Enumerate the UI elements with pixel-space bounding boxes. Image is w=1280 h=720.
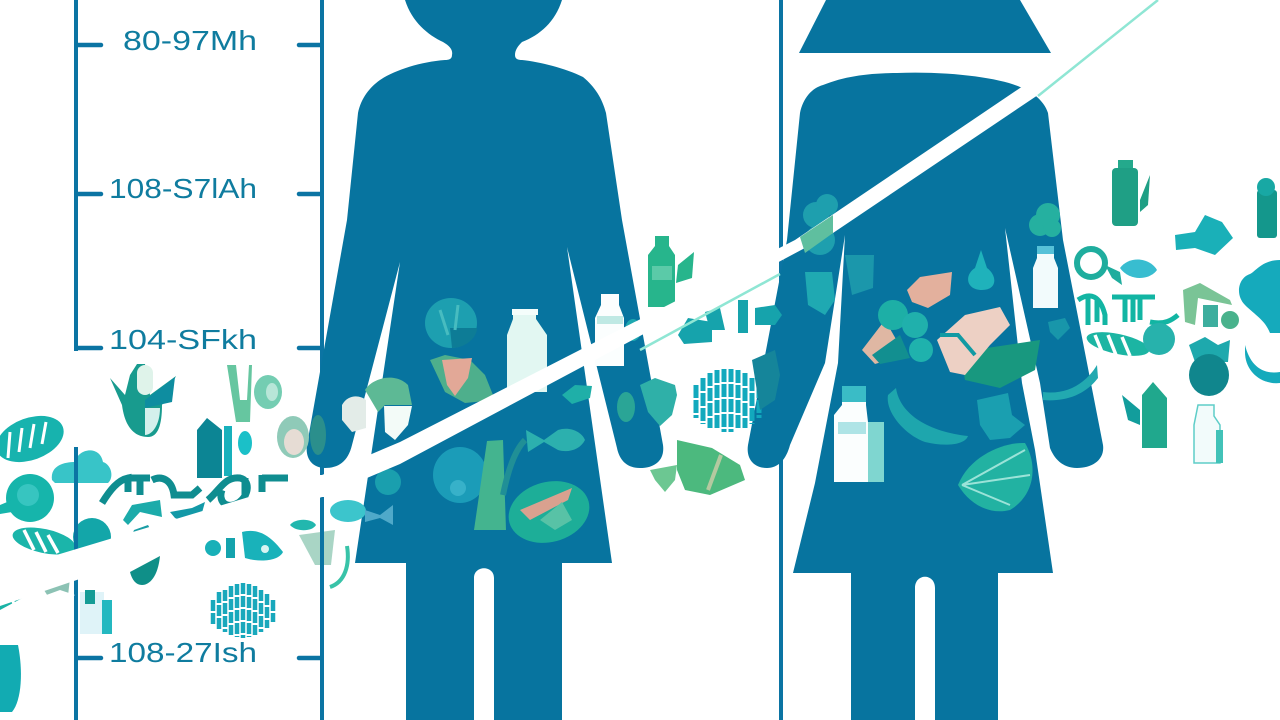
- icon: ring and leaf: [1077, 249, 1157, 285]
- icon: banana edge: [1245, 345, 1280, 383]
- icon: pale bottle: [1194, 405, 1223, 463]
- centre divider line: [779, 0, 783, 720]
- icon: green bottle: [1112, 160, 1150, 226]
- icon: dark teal shape on figure: [752, 350, 780, 410]
- icon: milk bottle small: [595, 294, 624, 366]
- icon: milk bottle right: [1033, 246, 1058, 308]
- icon: meat with greens: [430, 355, 495, 403]
- ruler overlay: [74, 447, 324, 597]
- icon: striped leaf: [1085, 328, 1151, 360]
- icon: green leaf top: [1029, 203, 1061, 237]
- icon: leafy cluster: [977, 393, 1025, 440]
- icon: green bottle: [648, 236, 675, 307]
- icon: small textured blob: [375, 469, 401, 495]
- icon: small fish: [123, 500, 205, 525]
- icon: bottom-left teal shape: [0, 645, 21, 712]
- icon: DNA helix: [102, 475, 288, 505]
- icon: mixed vegetable: [290, 520, 348, 587]
- icon: DNA helix: [1078, 296, 1178, 325]
- ruler label: third: 104-SFkh: [109, 324, 257, 355]
- icon: half round: [130, 556, 160, 585]
- food icons: right cluster: [1077, 160, 1280, 463]
- icon: mixed greens: [1183, 283, 1239, 329]
- icon: milk bottle large: [507, 309, 547, 392]
- icon: stripes lower left: [0, 578, 70, 610]
- icon: thin banana on arm: [1043, 365, 1098, 400]
- icon: corn husk: [110, 364, 176, 437]
- icon: round vegetable: [277, 416, 309, 458]
- icon: brain-like broccoli: [425, 298, 477, 348]
- icon: green cabbage wedge: [650, 440, 745, 495]
- icon: teal blob: [562, 385, 592, 404]
- icon: cloud blob: [330, 500, 366, 522]
- food icons: right figure: [803, 194, 1098, 511]
- figure: left silhouette with round head: [307, 0, 663, 720]
- ruler label: second: 108-S7lAh: [109, 173, 257, 204]
- icon: coral: [213, 583, 273, 638]
- icon: cloud-shaped food: [52, 450, 111, 483]
- icon: heart-shaped vegetable: [1239, 260, 1280, 333]
- icon: leek and cabbage: [227, 365, 282, 422]
- icon: steak pink: [907, 272, 952, 308]
- icon: bottle and capsule: [197, 418, 252, 478]
- icon: cabbage leaf: [958, 443, 1033, 511]
- icon: blobs group: [205, 531, 283, 560]
- icon: small wedge: [127, 525, 158, 548]
- icon: large meat with greens: [937, 307, 1040, 388]
- icon: leafy packet: [845, 255, 874, 295]
- icon: teal leaf on band: [803, 194, 838, 255]
- icon: fig: [968, 250, 994, 290]
- icon: fish blob: [1175, 215, 1233, 255]
- icon: broccoli: [862, 300, 933, 364]
- food icons: centre gap: [562, 236, 782, 495]
- icon: milk bottle with carton: [834, 386, 884, 482]
- icon: pale bottle: [80, 590, 112, 634]
- icon: plate with salmon: [502, 472, 596, 552]
- icon: striped leaf: [0, 407, 70, 471]
- food icons: left cluster: [0, 364, 366, 712]
- height ruler scale: [74, 0, 324, 720]
- icon: striped leaf small: [10, 523, 78, 559]
- icon: leafy item near hip: [342, 378, 412, 440]
- icon: round melon: [1143, 323, 1175, 355]
- icon: banana: [888, 388, 968, 445]
- icon: small blob: [625, 319, 641, 341]
- icon: teal pieces row: [678, 300, 782, 344]
- icon: left leaf: [805, 272, 835, 315]
- icon: small leaf on arm: [1048, 318, 1070, 340]
- icon: green carton: [1122, 382, 1167, 448]
- icon: celery stalk: [474, 440, 506, 530]
- figure: right silhouette with triangle head: [748, 0, 1103, 720]
- icon: textured round: [73, 518, 111, 556]
- icon: coral: [696, 369, 759, 432]
- icon: small bottle top right: [1257, 178, 1277, 238]
- icon: dark green patch on arm: [310, 415, 326, 455]
- icon: fish: [526, 429, 585, 452]
- icon: blob pair: [617, 378, 677, 426]
- ruler label: top: 80-97Mh: [123, 25, 257, 56]
- icon: round squash: [0, 474, 54, 522]
- icon: dark fruit with leaves: [1189, 337, 1230, 396]
- icon: small blue bow fish: [365, 505, 393, 525]
- ruler label: bottom: 108-27Ish: [109, 637, 257, 668]
- icon: green leaf: [676, 252, 694, 283]
- icon: blue leafy blob: [433, 447, 487, 503]
- food icons: left figure: [310, 294, 641, 552]
